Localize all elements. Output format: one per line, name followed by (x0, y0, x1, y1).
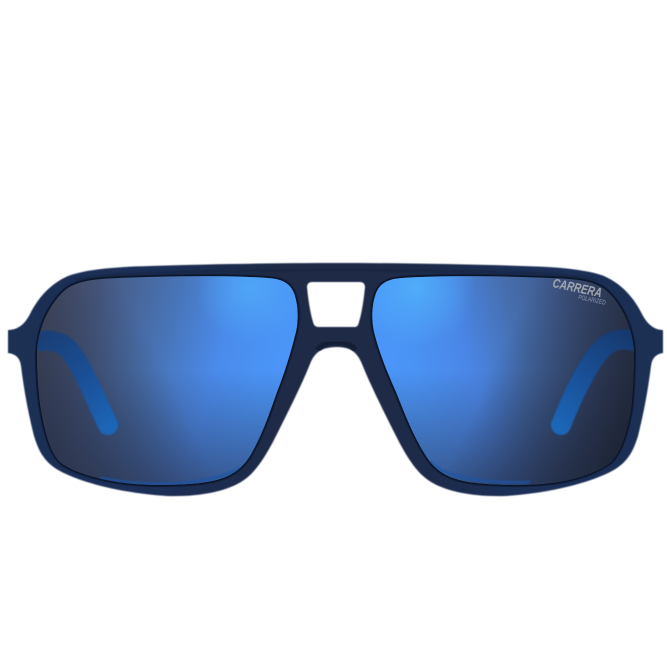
right lens rim (372, 276, 634, 485)
brand logo: POLARIZED: POLARIZED (578, 295, 607, 307)
left lens (30, 270, 305, 490)
sunglasses (8, 263, 663, 496)
nose bridge shading (318, 342, 355, 350)
infographic: product photo of blue sunglasses (7, 262, 664, 497)
right temple arm seen through lens (561, 339, 637, 425)
lower edge reflection (100, 468, 240, 484)
left temple arm seen through lens (34, 341, 108, 425)
left lens rim (37, 276, 298, 485)
frame top edge shading (75, 270, 597, 280)
brand logo: CARRERA: CARRERA (551, 276, 603, 300)
lower edge reflection (430, 462, 530, 482)
right lens (365, 270, 640, 490)
frame (8, 263, 663, 496)
